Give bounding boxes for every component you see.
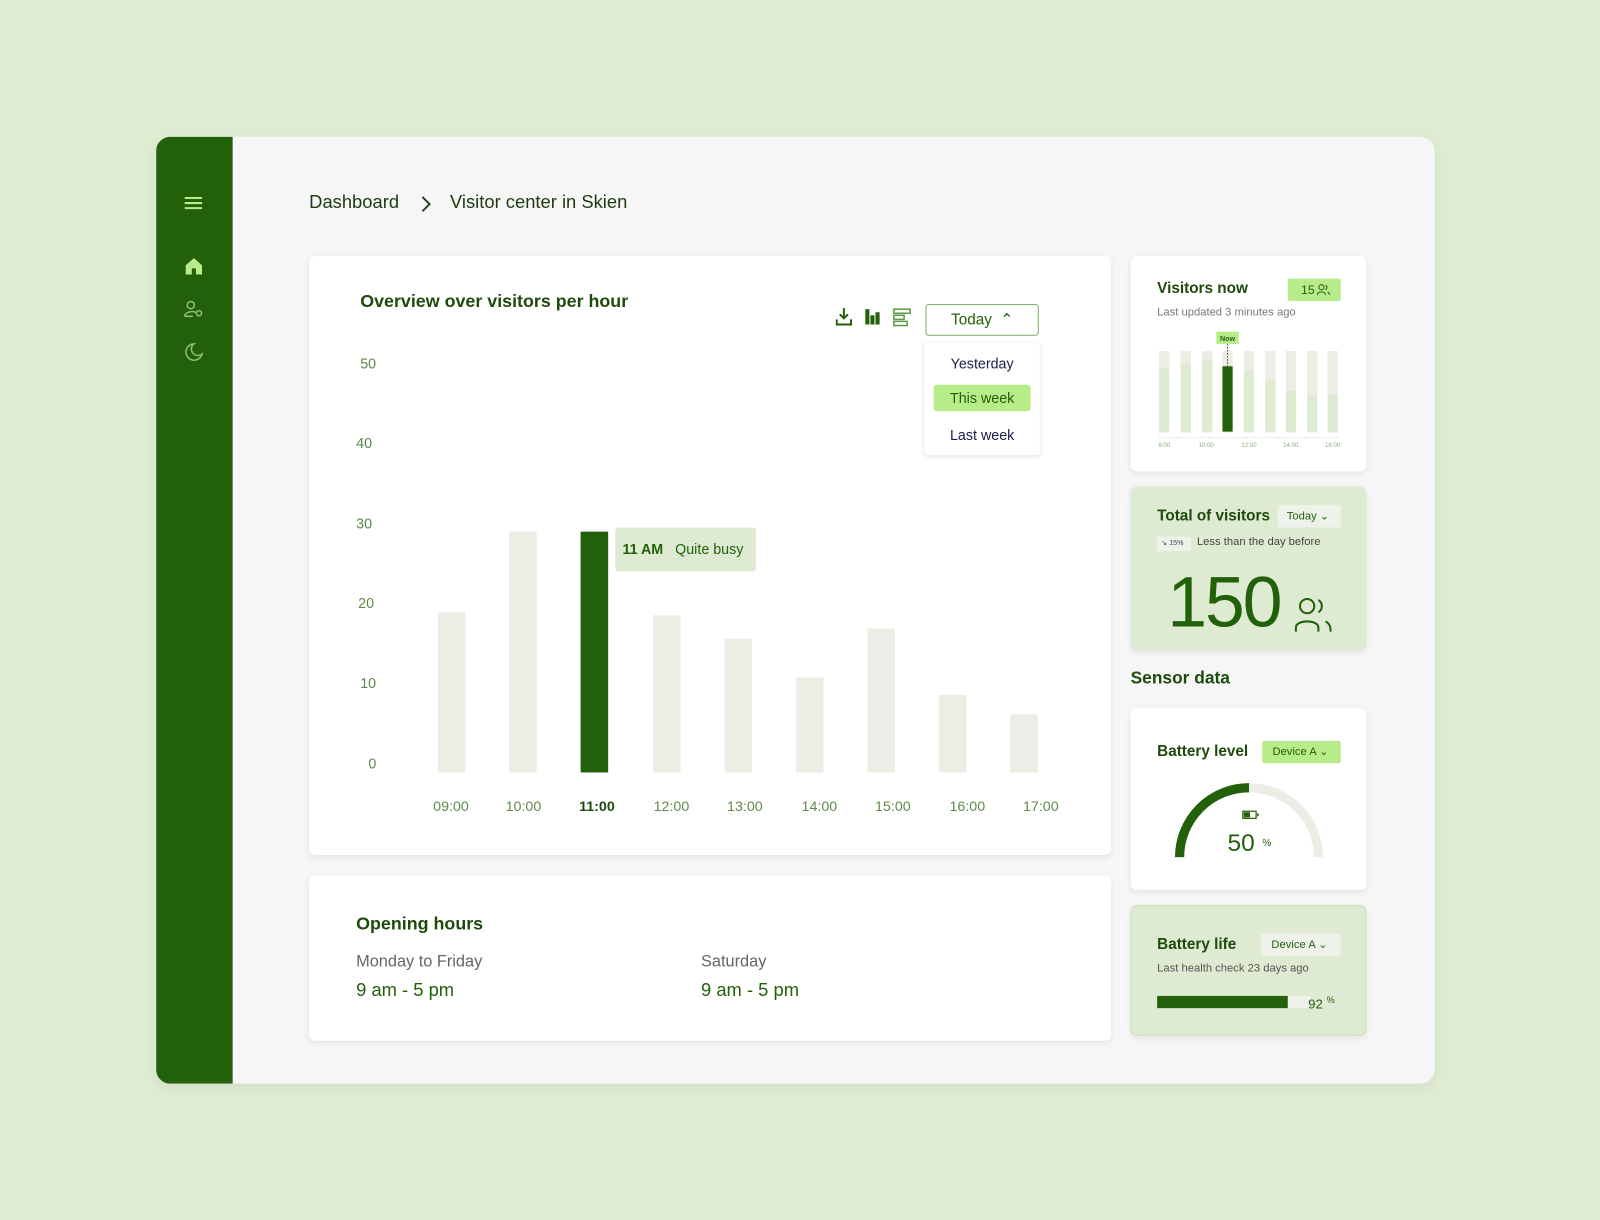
heading: Total of visitors <box>1157 507 1270 524</box>
panel: visitors per hour chart: 10 <box>360 674 376 691</box>
icon: badge people <box>1316 284 1330 295</box>
icon: people <box>1294 598 1332 632</box>
heading: Visitors now <box>1157 280 1248 297</box>
panel: opening hours <box>309 876 1111 1041</box>
weekday hours <box>356 953 482 1000</box>
sidebar <box>156 137 233 1084</box>
mini bar chart: 12:00 <box>1241 442 1257 449</box>
panel: visitors now <box>1131 256 1366 471</box>
breadcrumb: Dashboard <box>309 192 399 212</box>
mini bar chart: 16:00 <box>1325 442 1341 449</box>
saturday hours: Saturday <box>701 953 766 970</box>
dropdown menu: Yesterday <box>951 355 1014 371</box>
panel: battery level <box>1131 708 1366 890</box>
gauge: % <box>1262 838 1271 849</box>
bar chart: 10:00 <box>506 799 541 815</box>
bar chart: 09:00 <box>433 799 469 815</box>
panel: visitors per hour chart: 20 <box>358 595 374 611</box>
bar chart: 12:00 <box>654 799 689 815</box>
panel: battery life <box>1131 905 1366 1036</box>
dropdown device A <box>1262 741 1341 763</box>
mini bar chart: 14:00 <box>1283 442 1299 449</box>
panel: visitors per hour chart: 40 <box>356 435 372 451</box>
saturday hours: 9 am - 5 pm <box>701 980 799 1000</box>
percent: 92 % <box>1308 995 1335 1012</box>
panel: visitors per hour chart <box>309 256 1111 855</box>
panel: visitors per hour chart: 30 <box>356 515 372 532</box>
bar chart: 13:00 <box>727 799 763 815</box>
bar chart: 15:00 <box>875 799 911 815</box>
trend badge: ↘ 15% <box>1161 540 1183 547</box>
trend text: Less than the day before <box>1197 536 1321 548</box>
dropdown menu: This week <box>950 390 1014 406</box>
gauge: 50 <box>1228 830 1255 857</box>
dropdown menu <box>924 343 1040 455</box>
callout: 11 AM quite busy: 11 AM Quite busy <box>622 541 743 557</box>
icons: chart tools <box>836 308 911 326</box>
subtitle: Last updated 3 minutes ago <box>1157 306 1296 318</box>
dropdown device A: Device A ⌄ <box>1271 939 1328 951</box>
icon: menu <box>184 197 202 210</box>
dropdown device A <box>1261 934 1341 956</box>
icon: home <box>186 258 202 274</box>
dropdown today <box>1278 505 1341 528</box>
trend badge <box>1157 537 1191 551</box>
weekday hours: Monday to Friday <box>356 953 482 970</box>
heading: sensor data: Sensor data <box>1131 668 1230 688</box>
bar chart: 14:00 <box>802 799 837 815</box>
mini bar chart: 8:00 <box>1158 442 1171 449</box>
icon: moon <box>185 343 203 361</box>
saturday hours <box>701 953 799 1000</box>
breadcrumb current: Visitor center in Skien <box>450 192 627 212</box>
bar chart: 11:00 <box>579 799 615 815</box>
bar chart: 17:00 <box>1023 799 1059 815</box>
weekday hours: 9 am - 5 pm <box>356 980 454 1000</box>
dropdown menu: Last week <box>950 427 1014 443</box>
heading: Battery level <box>1157 743 1248 760</box>
mini bar chart: Now <box>1220 335 1236 343</box>
dropdown: today <box>926 304 1039 336</box>
icon: user settings <box>184 300 202 318</box>
panel: visitors per hour chart: 50 <box>360 355 376 371</box>
big number: 150 <box>1167 562 1280 642</box>
panel: total of visitors <box>1131 487 1366 650</box>
panel: visitors per hour chart: 0 <box>368 755 376 771</box>
callout: 11 AM quite busy <box>615 528 756 571</box>
chart title: Overview over visitors per hour <box>360 291 628 311</box>
badge: 15 <box>1288 279 1341 301</box>
mini bar chart <box>1158 332 1341 449</box>
badge: 15: 15 <box>1301 283 1315 297</box>
icon: chevron <box>422 196 431 212</box>
bar chart <box>433 532 1059 815</box>
progress bar <box>1157 996 1310 1008</box>
bar chart: 16:00 <box>949 799 985 815</box>
app window <box>156 137 1435 1084</box>
heading: Opening hours <box>356 913 483 934</box>
dropdown today: Today ⌄ <box>1287 510 1329 522</box>
gauge <box>1175 783 1323 858</box>
dropdown device A: Device A ⌄ <box>1272 746 1329 758</box>
dropdown: today: Today ⌃ <box>951 311 1013 329</box>
subtitle: Last health check 23 days ago <box>1157 962 1309 974</box>
heading: Battery life <box>1157 936 1236 953</box>
y axis labels <box>356 355 376 771</box>
mini bar chart: 10:00 <box>1198 442 1214 449</box>
